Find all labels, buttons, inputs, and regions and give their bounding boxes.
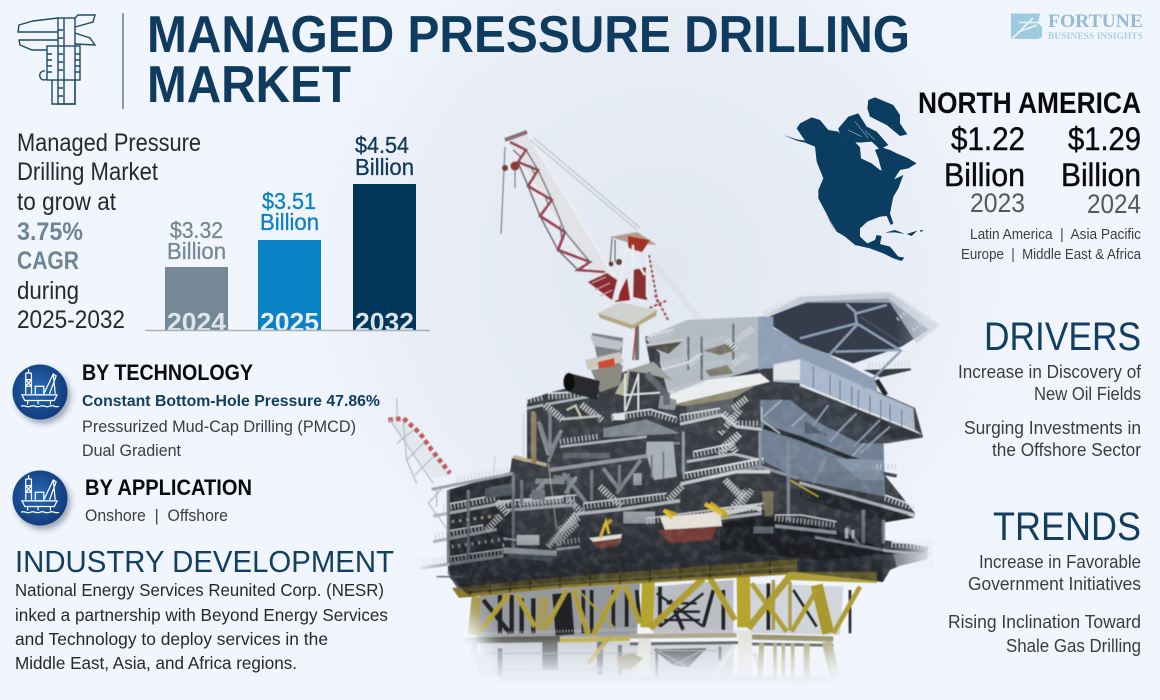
bar 2032 xyxy=(353,132,416,337)
panel: north america: Latin America | Asia Pacific xyxy=(970,227,1141,243)
text block: market growth: to grow at xyxy=(17,188,116,216)
panel: industry development xyxy=(15,544,394,673)
panel: trends: Government Initiatives xyxy=(968,574,1141,594)
title xyxy=(147,6,910,114)
photo grain xyxy=(448,320,922,593)
bar 2024: $3.32 xyxy=(170,217,223,243)
yellow braces xyxy=(478,572,860,635)
text block: market growth: 2025-2032 xyxy=(17,306,125,334)
panel: drivers: Surging Investments in xyxy=(964,418,1141,438)
text block: market growth: Drilling Market xyxy=(17,158,158,186)
panel: north america: Billion xyxy=(1061,157,1141,193)
lower legs xyxy=(642,638,645,675)
panel: by application xyxy=(85,475,252,525)
logo: Fortune Business Insights xyxy=(1011,11,1143,42)
lifeboats xyxy=(589,504,722,548)
bar 2024 xyxy=(165,217,228,337)
far crane on left deck xyxy=(388,398,452,528)
bottom band xyxy=(500,677,853,687)
title: MANAGED PRESSURE DRILLING xyxy=(147,6,910,64)
upper and central section xyxy=(520,317,773,530)
panel: trends: Shale Gas Drilling xyxy=(1006,636,1141,656)
left section decks xyxy=(420,410,580,590)
panel: by technology xyxy=(82,360,380,460)
text block: market growth: Managed Pressure xyxy=(17,129,201,157)
icon: rig badge application xyxy=(12,470,68,526)
flare pipe xyxy=(564,373,600,400)
panel: drivers: the Offshore Sector xyxy=(992,440,1141,460)
bar 2032: $4.54 xyxy=(355,132,409,158)
panel: by technology: Constant Bottom-Hole Pressure 47.86% xyxy=(82,393,380,410)
panel: by application: Onshore | Offshore xyxy=(85,506,228,525)
panel: by technology: BY TECHNOLOGY xyxy=(82,360,253,385)
crane mast and cab xyxy=(588,232,668,329)
crane pedestal xyxy=(585,322,637,392)
mist fades xyxy=(400,632,960,690)
logo: Fortune Business Insights: BUSINESS INSIGHTS xyxy=(1048,32,1143,42)
panel: north america: Billion xyxy=(944,157,1025,193)
title: MARKET xyxy=(147,56,351,114)
platform legs and bracing xyxy=(463,572,860,687)
divider xyxy=(122,13,124,109)
panel: trends: Increase in Favorable xyxy=(979,552,1141,572)
panel: north america: 2023 xyxy=(970,188,1025,218)
yellow columns xyxy=(473,597,477,635)
lower chord xyxy=(463,639,560,641)
panel: north america: 2024 xyxy=(1087,189,1141,219)
illustration: offshore drilling platform xyxy=(388,132,960,700)
yellow truss xyxy=(452,559,877,598)
panel: trends: Rising Inclination Toward xyxy=(948,612,1141,632)
bar 2025: 2025 xyxy=(260,307,319,337)
bar 2025: $3.51 xyxy=(262,188,316,214)
panel: industry development: Middle East, Asia, and Africa regions. xyxy=(15,653,297,673)
dark rear members xyxy=(483,583,850,635)
logo: Fortune Business Insights: FORTUNE xyxy=(1048,11,1143,32)
text block: market growth: CAGR xyxy=(17,247,79,275)
panel: north america xyxy=(918,87,1142,263)
panel: industry development: and Technology to deploy services in the xyxy=(15,629,328,649)
bar 2025 xyxy=(258,188,321,337)
panel: industry development: INDUSTRY DEVELOPMENT xyxy=(15,544,394,579)
icon: north america map xyxy=(783,97,924,261)
dark backing xyxy=(477,583,640,638)
icon: caliper xyxy=(18,15,95,104)
panel: by application: BY APPLICATION xyxy=(85,475,252,500)
panel: trends xyxy=(948,505,1141,656)
icon: rig badge technology xyxy=(12,364,68,420)
panel: north america: $1.22 xyxy=(951,121,1025,157)
right module xyxy=(758,292,940,435)
right lower section xyxy=(720,400,930,567)
panel: industry development: National Energy Services Reunited Corp. (NESR) xyxy=(15,580,384,600)
panel: drivers: DRIVERS xyxy=(984,315,1141,359)
bar 2032: Billion xyxy=(355,154,414,180)
bar 2025: Billion xyxy=(260,209,319,235)
underdeck shadow xyxy=(448,470,883,594)
panel: drivers: New Oil Fields xyxy=(1034,384,1141,404)
bar 2024: Billion xyxy=(167,238,226,264)
panel: north america: $1.29 xyxy=(1068,121,1141,157)
bar 2032: 2032 xyxy=(355,307,414,337)
panel: trends: TRENDS xyxy=(993,505,1141,549)
panel: industry development: inked a partnership with Beyond Energy Services xyxy=(15,605,388,625)
rail at leg nodes xyxy=(482,629,840,633)
text block: market growth xyxy=(17,129,201,334)
panel: by technology: Pressurized Mud-Cap Drilling (PMCD) xyxy=(82,417,356,436)
text block: market growth: during xyxy=(17,277,79,305)
panel: drivers xyxy=(958,315,1142,460)
panel: north america: Europe | Middle East & Africa xyxy=(961,247,1142,263)
text block: market growth: 3.75% xyxy=(17,218,83,246)
bar 2024: 2024 xyxy=(167,307,227,337)
panel: drivers: Increase in Discovery of xyxy=(958,362,1142,382)
crane boom xyxy=(501,132,702,320)
main body silhouette xyxy=(448,318,930,594)
bar chart xyxy=(145,132,430,337)
panel: by technology: Dual Gradient xyxy=(82,441,181,460)
